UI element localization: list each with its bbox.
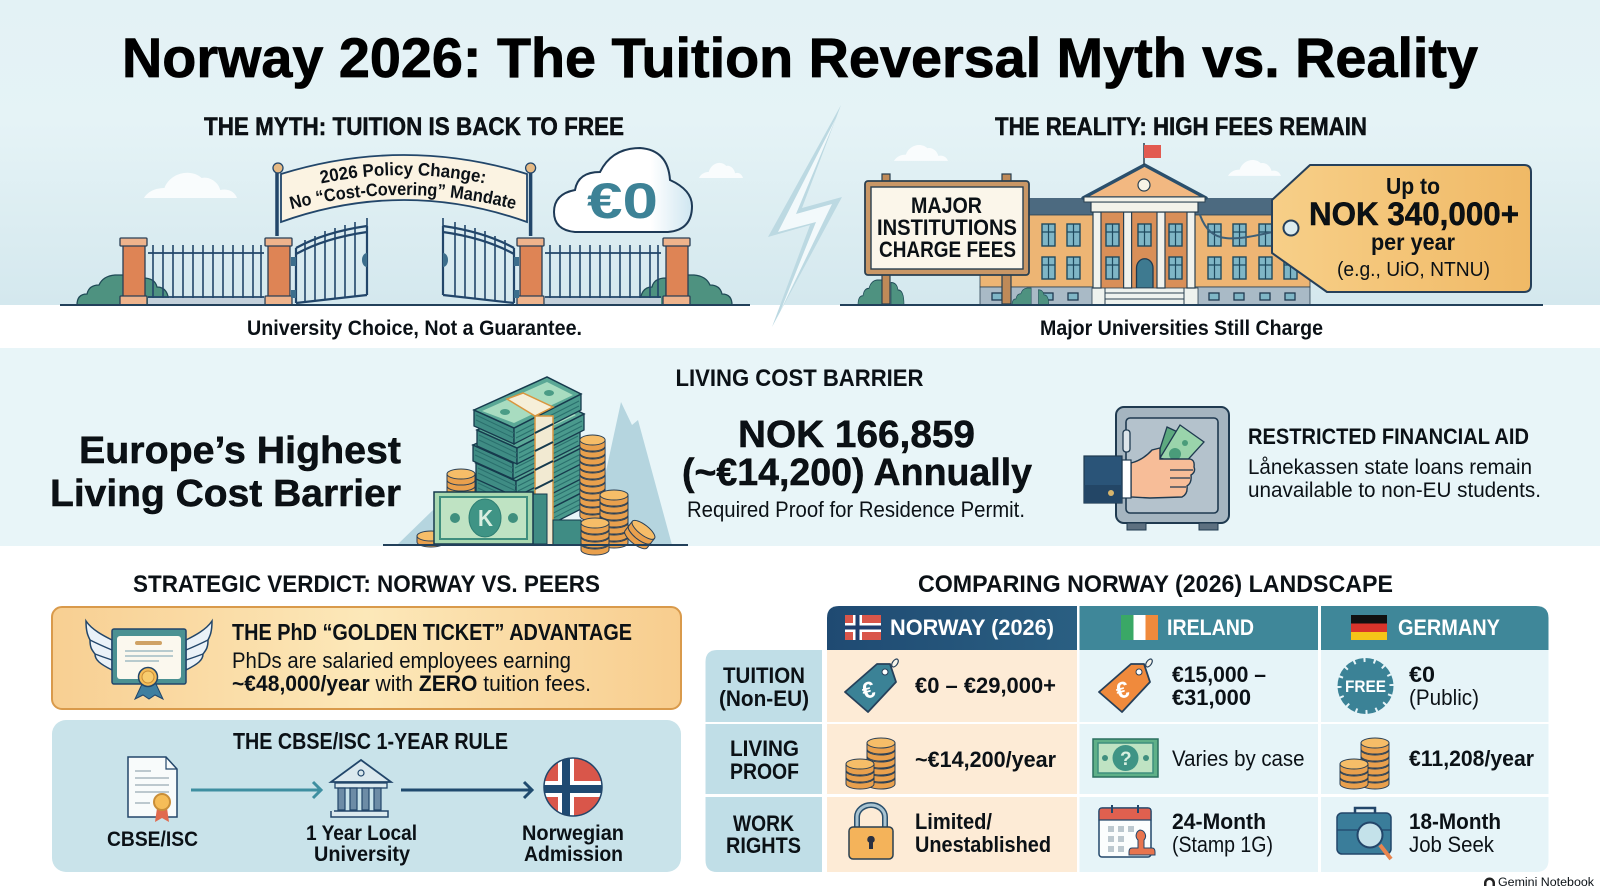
row header: living proof: PROOF (730, 759, 799, 784)
text: restricted financial aid: unavailable to non-EU students. (1248, 479, 1541, 502)
caption: reality: Major Universities Still Charge (1040, 317, 1323, 340)
heading: living cost barrier: LIVING COST BARRIER (676, 365, 924, 392)
panel: comparison table (706, 571, 1548, 872)
panel: strategic verdict (52, 571, 681, 872)
caption: myth: University Choice, Not a Guarantee. (247, 317, 582, 340)
label: 1 year local university: 1 Year Local (306, 822, 417, 845)
cell: Norway tuition: €0 – €29,000+ (915, 673, 1056, 698)
icon: certificate document (128, 757, 177, 822)
icon: lightning bolt divider (768, 105, 842, 327)
sign: major institutions charge fees: MAJOR (911, 193, 982, 218)
label: Norwegian admission (522, 822, 624, 866)
cell: Ireland work rights: 24-Month (1172, 809, 1266, 834)
sign: major institutions charge fees: INSTITUTIONS (877, 215, 1017, 240)
icon: cloud with zero euro: €0 (587, 173, 658, 229)
cell: Norway work rights: Unestablished (915, 832, 1051, 857)
ground line (840, 304, 1543, 306)
cell: Ireland living proof: Varies by case (1172, 746, 1304, 771)
text: restricted financial aid: Lånekassen state loans remain (1248, 456, 1532, 479)
panel: the reality (840, 113, 1543, 340)
label: 1 year local university: University (314, 843, 410, 866)
heading: strategic verdict: STRATEGIC VERDICT: NORWAY VS. PEERS (133, 571, 600, 598)
big number: NOK 166,859 (682, 414, 1032, 522)
cell: Norway tuition: € (859, 676, 878, 704)
row header: work rights (726, 811, 801, 858)
price tag: up to NOK 340,000+: Up to (1386, 173, 1440, 199)
illustration: money stacks and coins: K (478, 505, 493, 531)
price tag: up to NOK 340,000+: NOK 340,000+ (1309, 196, 1519, 232)
cell: Germany tuition: €0 (1409, 662, 1435, 687)
ground line (60, 304, 750, 306)
heading: europe's highest (50, 430, 401, 515)
cell: Norway living proof: ~€14,200/year (915, 747, 1056, 772)
cell: Ireland tuition: €15,000 – (1172, 662, 1266, 687)
cell: Ireland tuition (1099, 658, 1266, 712)
heading: comparing Norway: COMPARING NORWAY (2026) LANDSCAPE (918, 571, 1393, 598)
cell: Germany work rights: 18-Month (1409, 809, 1501, 834)
column header: Germany (1351, 615, 1500, 640)
arrow: to university (191, 782, 321, 798)
card: PhD golden ticket: PhDs are salaried employees earning (232, 648, 571, 673)
row header: tuition: TUITION (723, 663, 805, 688)
illustration: university building (894, 143, 1310, 305)
row header: work rights: RIGHTS (726, 833, 801, 858)
price tag: up to NOK 340,000+ (1272, 165, 1531, 292)
row header: tuition (719, 663, 809, 711)
heading: europe's highest: Living Cost Barrier (50, 473, 401, 515)
arrow: to Norway (401, 782, 532, 798)
column header: Norway: NORWAY (2026) (890, 615, 1054, 640)
heading: reality: THE REALITY: HIGH FEES REMAIN (995, 113, 1367, 141)
panel: living cost barrier (50, 365, 1541, 555)
label: Norwegian admission: Admission (524, 843, 623, 866)
column header: Ireland (1121, 615, 1254, 640)
table cell backgrounds (706, 606, 1548, 872)
price tag: up to NOK 340,000+: per year (1371, 229, 1455, 255)
card: PhD golden ticket: ~€48,000/year with ZERO tuition fees. (232, 671, 591, 696)
icon: university building (331, 760, 391, 817)
watermark: Gemini Notebook: Gemini Notebook (1498, 877, 1594, 889)
card: CBSE/ISC 1-year rule: THE CBSE/ISC 1-YEAR RULE (233, 728, 508, 754)
cell: Germany work rights: Job Seek (1409, 832, 1495, 857)
cell: Norway tuition (845, 658, 1056, 712)
sign: major institutions charge fees (858, 174, 1049, 305)
illustration: open gate with banner (76, 147, 743, 304)
card: PhD golden ticket (52, 607, 681, 709)
label: 1 year local university (306, 822, 417, 866)
cell: Ireland work rights (1099, 805, 1273, 857)
illustration: open gate with banner: No “Cost-Covering” Mandate (289, 182, 516, 209)
cell: Ireland living proof: ? (1120, 749, 1132, 770)
big number: NOK 166,859: Required Proof for Residence Permit. (687, 497, 1025, 522)
cell: Germany tuition: (Public) (1409, 685, 1479, 710)
title: Norway 2026: The Tuition Reversal Myth vs. Reality (122, 26, 1478, 89)
cell: Ireland work rights: (Stamp 1G) (1172, 832, 1273, 857)
row header: work rights: WORK (733, 811, 794, 836)
heading: myth: THE MYTH: TUITION IS BACK TO FREE (204, 113, 624, 141)
cell: Norway work rights: Limited/ (915, 809, 992, 834)
illustration: money stacks and coins (383, 377, 688, 555)
cell: Germany work rights (1337, 808, 1501, 859)
icon: winged certificate (86, 621, 212, 699)
card: CBSE/ISC 1-year rule (52, 720, 681, 872)
sign: major institutions charge fees: CHARGE FEES (879, 237, 1016, 262)
cell: Germany living proof: €11,208/year (1409, 746, 1534, 771)
icon: Norway flag circle (544, 758, 602, 816)
big number: NOK 166,859: (~€14,200) Annually (682, 452, 1032, 494)
icon: cloud with zero euro (554, 148, 692, 232)
row header: tuition: (Non-EU) (719, 686, 809, 711)
column header: Ireland: IRELAND (1167, 615, 1254, 640)
text: restricted financial aid: RESTRICTED FINANCIAL AID (1248, 424, 1529, 449)
cell: Germany tuition: FREE (1345, 677, 1386, 696)
panel: the myth (60, 113, 750, 380)
cell: Germany tuition (1340, 660, 1479, 712)
icon: hand taking money from safe (1084, 407, 1229, 530)
card: PhD golden ticket: THE PhD “GOLDEN TICKET” ADVANTAGE (232, 619, 632, 645)
cell: Germany living proof (1340, 738, 1534, 789)
cell: Norway living proof (846, 738, 1056, 789)
label: Norwegian admission: Norwegian (522, 822, 624, 845)
price tag: up to NOK 340,000+: (e.g., UiO, NTNU) (1337, 259, 1490, 281)
cell: Norway work rights (849, 805, 1051, 859)
cell: Ireland tuition: € (1113, 676, 1132, 704)
heading: europe's highest: Europe’s Highest (79, 430, 401, 472)
cell: Ireland tuition: €31,000 (1172, 685, 1251, 710)
cell: Ireland living proof (1093, 739, 1304, 777)
row header: living proof: LIVING (730, 736, 799, 761)
label: CBSE/ISC: CBSE/ISC (107, 828, 198, 851)
big number: NOK 166,859: NOK 166,859 (738, 414, 975, 456)
row header: living proof (730, 736, 799, 784)
column header: Germany: GERMANY (1398, 615, 1500, 640)
illustration: open gate with banner: 2026 Policy Change: (320, 162, 486, 184)
text: restricted financial aid (1248, 424, 1541, 502)
